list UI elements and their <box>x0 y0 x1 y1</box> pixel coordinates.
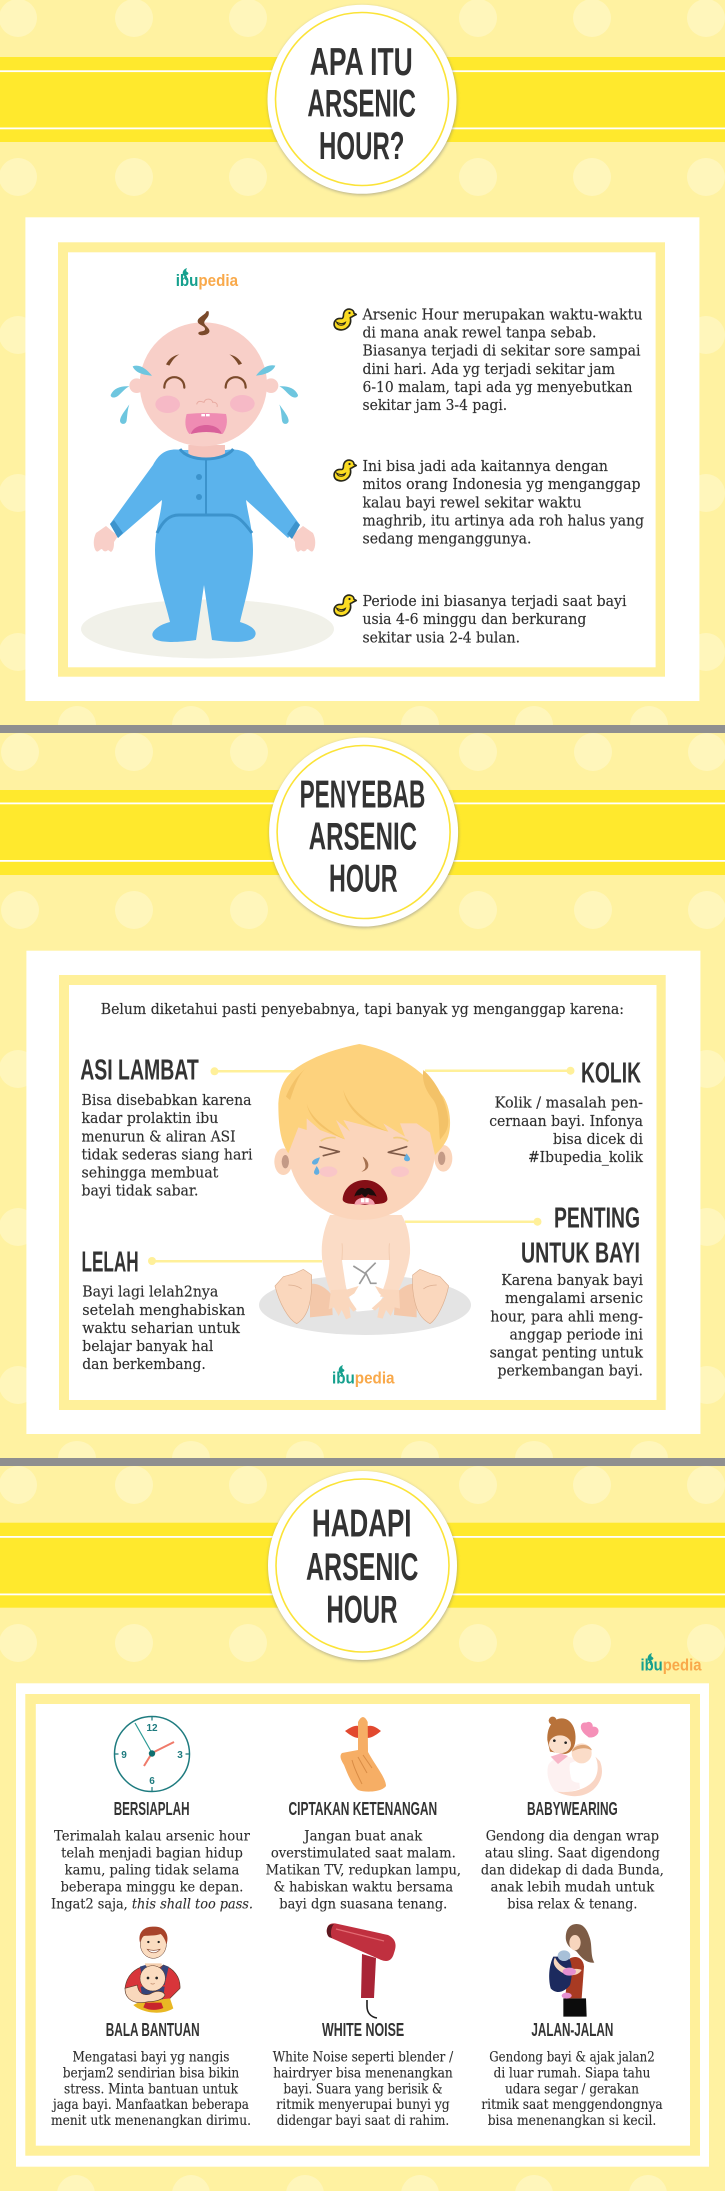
panel: causes <box>26 951 700 1434</box>
tip: Jalan-jalan: JALAN-JALAN <box>531 2019 613 2040</box>
tip: Ciptakan ketenangan: bayi dgn suasana tenang. <box>279 1897 447 1913</box>
cause: lelah: belajar banyak hal <box>82 1337 213 1355</box>
icon: mother holding baby <box>547 1717 602 1796</box>
title badge: Penyebab Arsenic Hour <box>269 738 458 928</box>
text: period paragraph: usia 4-6 minggu dan berkurang <box>362 610 587 628</box>
title text: HADAPI <box>312 1503 412 1546</box>
cause: kolik: #Ibupedia_kolik <box>528 1148 644 1166</box>
tip: Ciptakan ketenangan: CIPTAKAN KETENANGAN <box>288 1798 437 1819</box>
title text: HOUR? <box>319 125 404 168</box>
tip: Babywearing: BABYWEARING <box>527 1798 618 1819</box>
illustration: crying baby in blue onesie <box>81 311 334 658</box>
icon: hairdryer <box>327 1923 396 2018</box>
icon: clock <box>114 1716 190 1792</box>
tip: White noise: didengar bayi saat di rahim. <box>277 2113 449 2129</box>
left leg and foot <box>275 1269 333 1324</box>
icon: father carrying baby <box>125 1927 180 2013</box>
tip: White noise: White Noise seperti blender / <box>273 2050 453 2066</box>
icon: clock: 9 <box>121 1750 127 1761</box>
icon: woman with baby carrier <box>549 1924 594 2017</box>
cause: lelah <box>82 1247 245 1373</box>
cause: lelah: LELAH <box>82 1247 139 1279</box>
text: definition paragraph: 6-10 malam, tapi ada yg menyebutkan <box>362 378 633 396</box>
tip: Bersiaplah: beberapa minggu ke depan. <box>61 1880 243 1896</box>
text: myth paragraph: maghrib, itu artinya ada roh halus yang <box>362 512 644 530</box>
tip: Jalan-jalan: Gendong bayi & ajak jalan2 <box>489 2050 655 2066</box>
tip: Jalan-jalan: bisa menenangkan si kecil. <box>488 2113 656 2129</box>
text: myth paragraph: Ini bisa jadi ada kaitannya dengan <box>362 457 608 475</box>
cause: penting untuk bayi: hour, para ahli meng- <box>490 1307 643 1325</box>
tip: Ciptakan ketenangan <box>266 1717 461 1913</box>
tip: Bala bantuan: Mengatasi bayi yg nangis <box>72 2050 230 2066</box>
cause: penting untuk bayi: sangat penting untuk <box>490 1344 644 1362</box>
cause: ASI lambat: ASI LAMBAT <box>80 1054 199 1086</box>
title text <box>300 773 425 901</box>
cause: penting untuk bayi: perkembangan bayi. <box>498 1362 643 1380</box>
tip: Bala bantuan <box>51 1927 251 2129</box>
cause: penting untuk bayi: mengalami arsenic <box>505 1289 643 1307</box>
illustration: crying blond baby <box>259 1044 471 1335</box>
cause: ASI lambat: Bisa disebabkan karena <box>82 1091 252 1109</box>
background: section 2 <box>0 733 725 1458</box>
tip: White noise: WHITE NOISE <box>322 2019 404 2040</box>
cause: lelah: setelah menghabiskan <box>82 1301 245 1319</box>
text: myth paragraph: mitos orang Indonesia yg menganggap <box>362 475 640 493</box>
title text: ARSENIC <box>309 815 417 858</box>
text: definition paragraph <box>362 305 643 414</box>
tip: Jalan-jalan: ritmik saat menggendongnya <box>481 2097 663 2113</box>
tip: Bersiaplah <box>51 1716 253 1913</box>
background: section 1 <box>0 0 725 725</box>
icon: clock: 6 <box>149 1776 155 1787</box>
tip: Babywearing <box>481 1717 664 1913</box>
title text: ARSENIC <box>307 83 416 126</box>
tip: Jalan-jalan <box>481 1924 663 2129</box>
decorative band: section 3 <box>0 1523 725 1608</box>
text: period paragraph <box>362 592 627 646</box>
title text: APA ITU <box>310 41 413 84</box>
cause: kolik: KOLIK <box>581 1057 641 1089</box>
cause: penting untuk bayi: UNTUK BAYI <box>521 1237 640 1269</box>
background: section 3 <box>0 1466 725 2191</box>
title text: HOUR <box>329 858 398 901</box>
tip: Bala bantuan: jaga bayi. Manfaatkan beberapa <box>51 2097 249 2113</box>
tip: Bala bantuan: BALA BANTUAN <box>106 2019 200 2040</box>
tip: Bala bantuan: berjam2 sendirian bisa bikin <box>63 2066 239 2082</box>
tip: White noise: ritmik menyerupai bunyi yg <box>276 2097 450 2113</box>
text: definition paragraph: dini hari. Ada yg terjadi sekitar jam <box>362 360 615 378</box>
tip: Ciptakan ketenangan: overstimulated saat malam. <box>271 1846 456 1862</box>
decorative band: section 2 <box>0 790 725 875</box>
text: myth paragraph <box>362 457 644 548</box>
tip: Jalan-jalan: di luar rumah. Siapa tahu <box>494 2066 650 2082</box>
text: period paragraph: Periode ini biasanya terjadi saat bayi <box>362 592 627 610</box>
title text <box>306 1503 418 1632</box>
icon: duck bullet 1 <box>334 309 356 330</box>
cause: kolik: bisa dicek di <box>553 1130 643 1148</box>
cause: kolik: Kolik / masalah pen- <box>495 1094 643 1112</box>
tip: Bala bantuan: stress. Minta bantuan untuk <box>64 2081 238 2097</box>
cause: lelah: dan berkembang. <box>82 1355 206 1373</box>
text: period paragraph: sekitar usia 2-4 bulan. <box>362 628 520 646</box>
tip: Bersiaplah: BERSIAPLAH <box>114 1798 190 1819</box>
icon: duck bullet 3 <box>334 595 356 616</box>
cause: penting untuk bayi: PENTING <box>554 1203 640 1235</box>
panel: definition <box>25 217 699 701</box>
text: definition paragraph: Biasanya terjadi di sekitar sore sampai <box>362 342 641 360</box>
tip: Bersiaplah: Ingat2 saja, this shall too pass. <box>51 1897 253 1913</box>
tip: White noise <box>273 1923 453 2129</box>
cause: ASI lambat: menurun & aliran ASI <box>82 1127 236 1145</box>
tip: Bersiaplah: kamu, paling tidak selama <box>65 1863 240 1879</box>
cause: ASI lambat <box>80 1054 253 1200</box>
title text: PENYEBAB <box>300 773 425 816</box>
right leg and foot <box>394 1269 449 1324</box>
logo: ibupedia: ibupedia <box>332 1368 395 1388</box>
panel: coping tips <box>16 1683 709 2167</box>
tip: Babywearing: bisa relax & tenang. <box>507 1897 637 1913</box>
title text: ARSENIC <box>306 1546 418 1589</box>
text: definition paragraph: sekitar jam 3-4 pagi. <box>362 396 507 414</box>
title badge: Hadapi Arsenic Hour <box>268 1471 457 1661</box>
tip: Bersiaplah: telah menjadi bagian hidup <box>61 1846 243 1862</box>
tip: Ciptakan ketenangan: Jangan buat anak <box>302 1829 423 1845</box>
tip: Babywearing: anak lebih mudah untuk <box>491 1880 655 1896</box>
cause: lelah: Bayi lagi lelah2nya <box>82 1283 218 1301</box>
cause: lelah: waktu seharian untuk <box>82 1319 241 1337</box>
tip: Babywearing: atau sling. Saat digendong <box>485 1846 660 1862</box>
text: definition paragraph: Arsenic Hour merupakan waktu-waktu <box>362 305 643 323</box>
tip: Ciptakan ketenangan: Matikan TV, redupkan lampu, <box>266 1863 461 1879</box>
cause: penting untuk bayi: Karena banyak bayi <box>501 1271 643 1289</box>
text: myth paragraph: kalau bayi rewel sekitar waktu <box>362 493 582 511</box>
icon: finger on lips <box>341 1717 386 1792</box>
cause: penting untuk bayi: anggap periode ini <box>510 1325 643 1343</box>
logo: ibupedia: ibupedia <box>176 271 238 290</box>
title text <box>307 41 416 168</box>
title badge: Apa itu Arsenic Hour <box>268 5 457 195</box>
tip: Bersiaplah: Terimalah kalau arsenic hour <box>54 1829 250 1845</box>
text: intro sentence: Belum diketahui pasti penyebabnya, tapi banyak yg menganggap karena: <box>101 1000 624 1018</box>
icon: duck bullet 2 <box>334 460 356 481</box>
icon: clock: 12 <box>146 1723 158 1734</box>
cause: ASI lambat: tidak sederas siang hari <box>82 1145 253 1163</box>
cause: kolik: cernaan bayi. Infonya <box>489 1112 643 1130</box>
icon: clock: 3 <box>177 1750 183 1761</box>
cause: penting untuk bayi <box>490 1203 644 1380</box>
tip: White noise: hairdryer bisa menenangkan <box>273 2066 453 2082</box>
tip: Ciptakan ketenangan: & habiskan waktu bersama <box>273 1880 453 1896</box>
cause: ASI lambat: kadar prolaktin ibu <box>82 1109 218 1127</box>
text: definition paragraph: di mana anak rewel tanpa sebab. <box>362 324 596 342</box>
title text: HOUR <box>326 1589 398 1632</box>
decorative band: section 1 <box>0 57 725 142</box>
cause: ASI lambat: sehingga membuat <box>82 1164 218 1182</box>
tip: Babywearing: dan didekap di dada Bunda, <box>481 1863 664 1879</box>
tip: Jalan-jalan: udara segar / gerakan <box>505 2081 639 2097</box>
logo: ibupedia: ibupedia <box>640 1656 702 1674</box>
cause: ASI lambat: bayi tidak sabar. <box>82 1182 198 1200</box>
tip: Bala bantuan: menit utk menenangkan dirimu. <box>51 2113 251 2129</box>
connector lines <box>148 1067 574 1265</box>
cause: kolik <box>489 1057 644 1166</box>
text: myth paragraph: sedang menganggunya. <box>362 530 532 548</box>
tip: Babywearing: Gendong dia dengan wrap <box>486 1829 659 1845</box>
tip: White noise: bayi. Suara yang berisik & <box>284 2081 442 2097</box>
